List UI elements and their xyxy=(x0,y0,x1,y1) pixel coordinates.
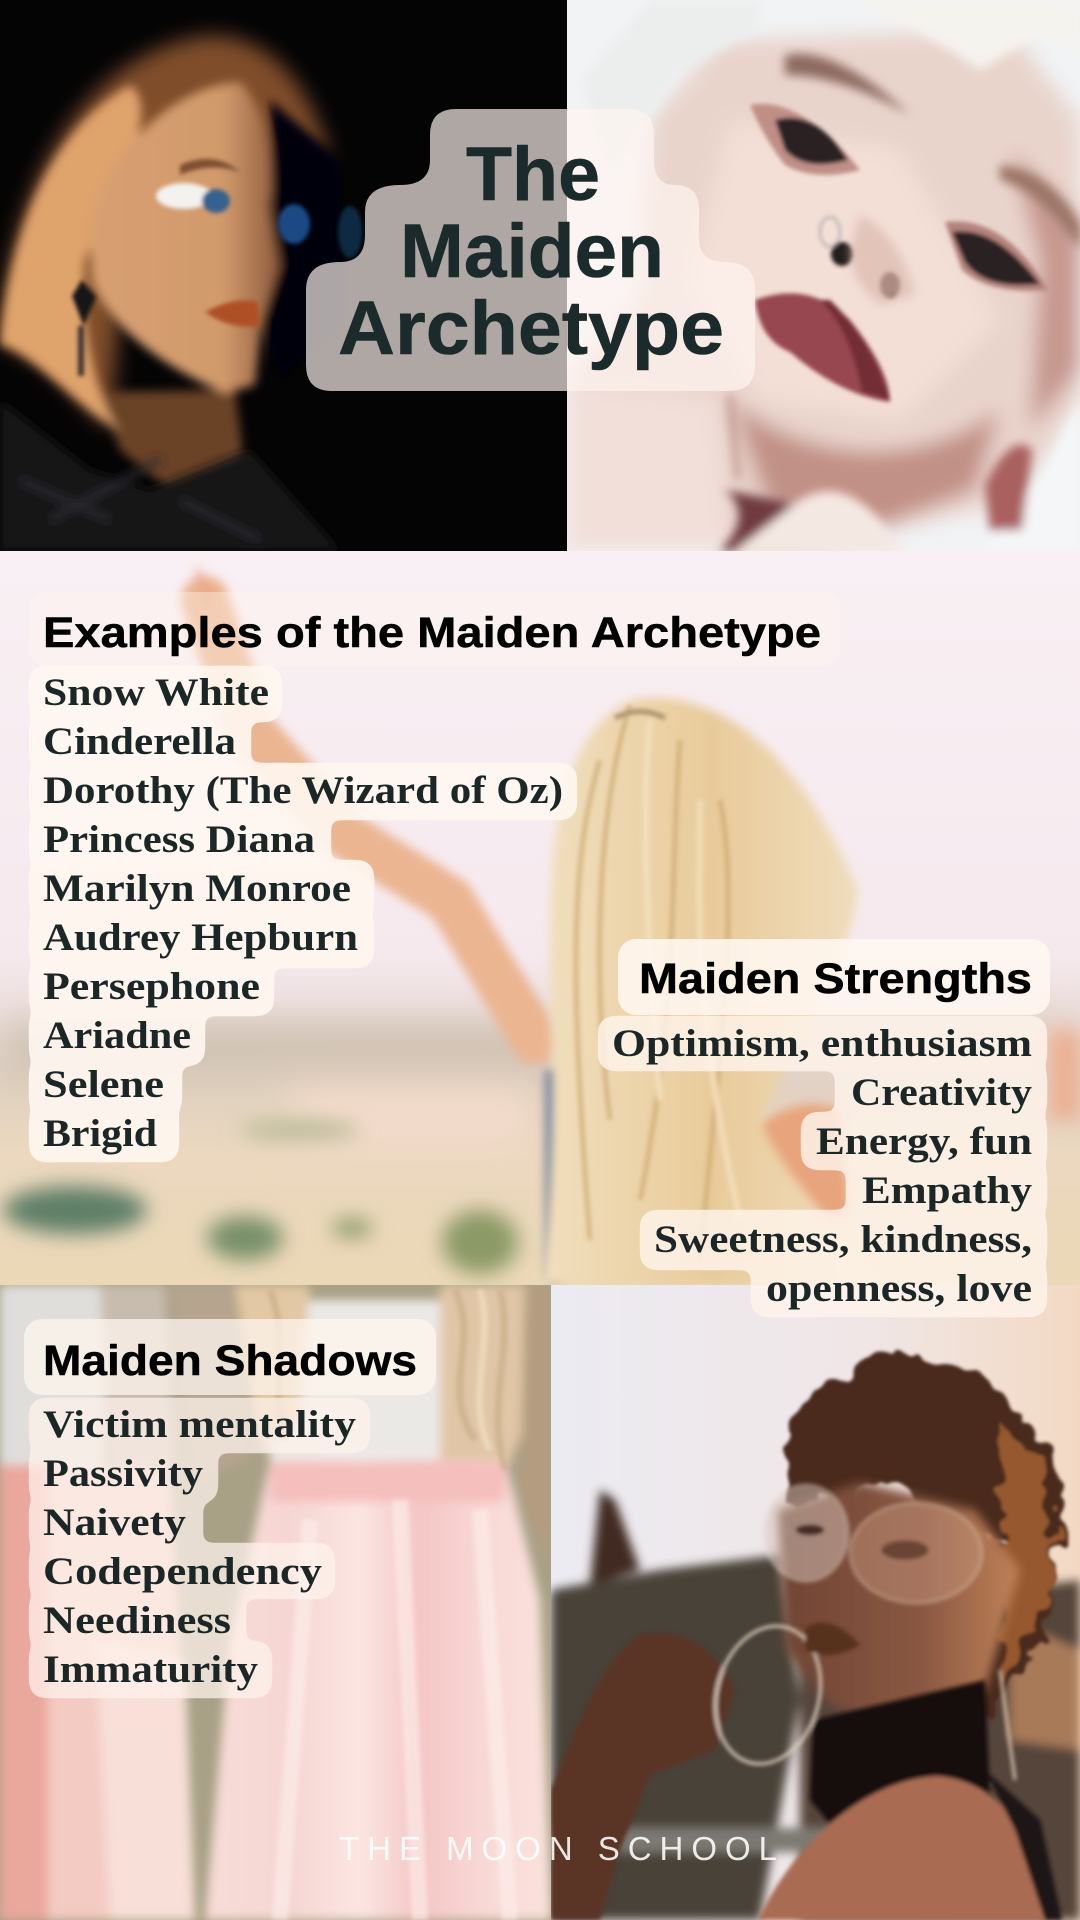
strengths list: Empathy xyxy=(862,1169,1033,1212)
panel: strengths xyxy=(598,939,1050,1317)
examples list: Audrey Hepburn xyxy=(43,916,358,959)
photo: close-up of pale-haired woman xyxy=(567,0,1080,551)
examples list: Persephone xyxy=(43,965,260,1008)
shadows heading: Maiden Shadows xyxy=(43,1337,417,1385)
examples list: Selene xyxy=(43,1063,164,1106)
footer brand text: THE MOON SCHOOL xyxy=(339,1830,777,1867)
shadows heading backdrop xyxy=(24,1319,436,1395)
shadows list: Codependency xyxy=(43,1550,323,1593)
strengths list: openness, love xyxy=(766,1267,1032,1310)
title text: Archetype xyxy=(338,286,724,371)
shadows list: Victim mentality xyxy=(43,1403,357,1446)
photo: two women in pink tulle skirts holding hands xyxy=(0,1285,551,1920)
examples list: Ariadne xyxy=(43,1014,191,1057)
examples heading: Examples of the Maiden Archetype xyxy=(43,609,821,657)
examples list: Snow White xyxy=(43,671,269,714)
strengths list: Sweetness, kindness, xyxy=(654,1218,1032,1261)
examples list: Princess Diana xyxy=(43,818,315,861)
examples list: Brigid xyxy=(43,1112,157,1155)
examples list xyxy=(43,671,563,1155)
shadows list: Passivity xyxy=(43,1452,204,1495)
strengths list xyxy=(612,1022,1033,1310)
photo: woman with long blond hair raising her arm xyxy=(0,551,1080,1285)
photo: woman with short curly hair and glasses xyxy=(551,1285,1080,1920)
title backdrop xyxy=(306,109,755,391)
title text: Maiden xyxy=(400,209,664,294)
examples list: Cinderella xyxy=(43,720,236,763)
title text: The xyxy=(466,132,600,217)
panel: examples xyxy=(29,592,840,1162)
title text xyxy=(338,132,724,371)
shadows list: Neediness xyxy=(43,1599,231,1642)
title xyxy=(306,109,755,391)
examples list: Marilyn Monroe xyxy=(43,867,351,910)
shadows list xyxy=(43,1403,357,1691)
panel: shadows xyxy=(24,1319,436,1698)
strengths heading: Maiden Strengths xyxy=(639,955,1032,1003)
photo: woman with glitter eye makeup xyxy=(0,0,567,551)
shadows list: Naivety xyxy=(43,1501,187,1544)
shadows list: Immaturity xyxy=(43,1648,259,1691)
shadows list backdrop xyxy=(29,1398,370,1698)
examples list backdrop xyxy=(29,666,577,1162)
examples list: Dorothy (The Wizard of Oz) xyxy=(43,769,563,812)
strengths list: Energy, fun xyxy=(816,1120,1032,1163)
examples heading backdrop xyxy=(29,592,840,666)
strengths heading backdrop xyxy=(618,939,1050,1015)
strengths list: Creativity xyxy=(851,1071,1033,1114)
strengths list: Optimism, enthusiasm xyxy=(612,1022,1032,1065)
strengths list backdrop xyxy=(598,1016,1047,1317)
